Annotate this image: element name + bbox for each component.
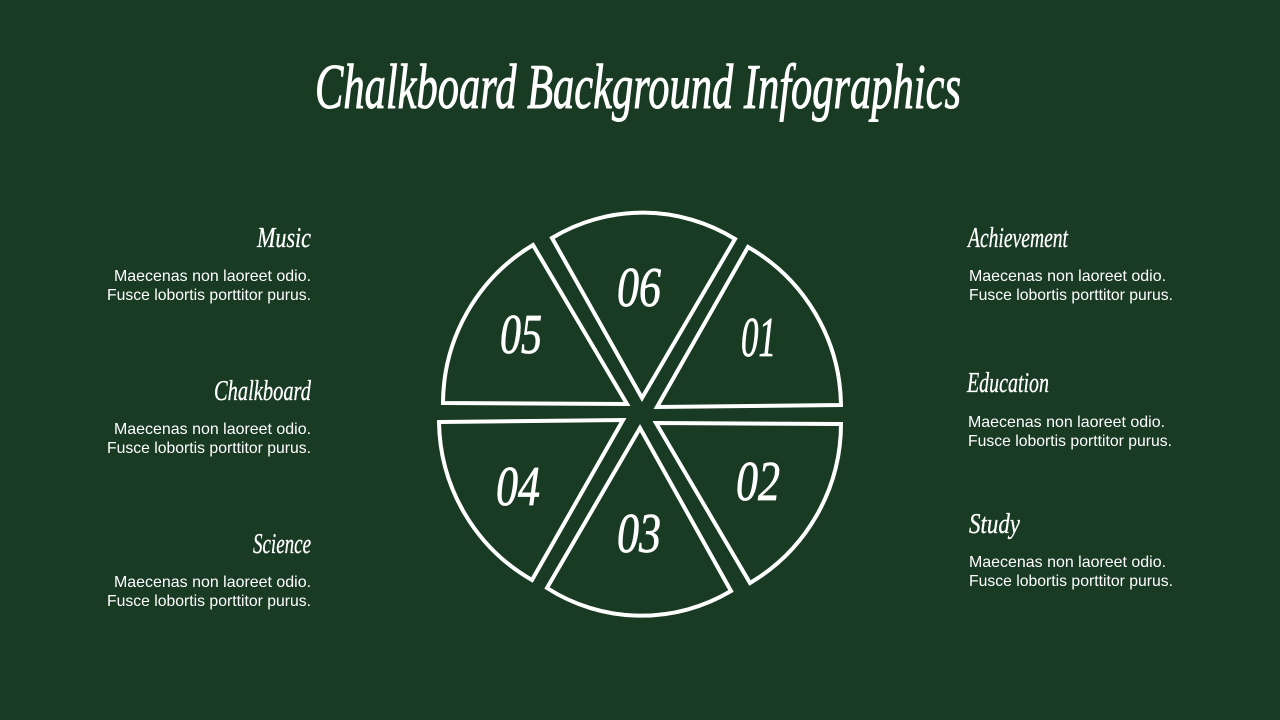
text block: Chalkboard: Fusce lobortis porttitor purus.: [107, 440, 311, 457]
segment 01: 01: [741, 307, 776, 369]
text block: Science: Science: [253, 529, 311, 560]
text block: Music: [107, 223, 311, 304]
text block: Science: Maecenas non laoreet odio.: [114, 574, 311, 591]
text block: Achievement: Achievement: [967, 223, 1069, 254]
text block: Achievement: Fusce lobortis porttitor purus.: [969, 287, 1173, 304]
text block: Study: Study: [969, 509, 1020, 540]
text block: Study: Maecenas non laoreet odio.: [969, 554, 1166, 571]
text block: Chalkboard: [107, 376, 312, 457]
segment 01: [657, 247, 841, 407]
segment 05: [443, 245, 627, 404]
segment 02: [656, 423, 841, 583]
text block: Education: [966, 368, 1172, 450]
text block: Chalkboard: Maecenas non laoreet odio.: [114, 421, 311, 438]
text block: Achievement: Maecenas non laoreet odio.: [969, 268, 1166, 285]
text block: Education: Education: [966, 368, 1049, 399]
segment 06: 06: [617, 257, 661, 319]
segment 03: [547, 428, 731, 616]
text block: Music: Fusce lobortis porttitor purus.: [107, 287, 311, 304]
text block: Education: Fusce lobortis porttitor purus.: [968, 433, 1172, 450]
text block: Education: Maecenas non laoreet odio.: [968, 414, 1165, 431]
pie chart: [439, 213, 841, 616]
segment 04: [439, 420, 623, 580]
text block: Science: Fusce lobortis porttitor purus.: [107, 593, 311, 610]
segment 06: [552, 213, 735, 398]
text block: Music: Music: [256, 223, 311, 254]
text block: Science: [107, 529, 311, 610]
text block: Study: [969, 509, 1173, 590]
text block: Achievement: [967, 223, 1173, 304]
text block: Music: Maecenas non laoreet odio.: [114, 268, 311, 285]
text block: Chalkboard: Chalkboard: [214, 376, 312, 407]
text block: Study: Fusce lobortis porttitor purus.: [969, 573, 1173, 590]
segment 04: 04: [496, 456, 540, 518]
title: Chalkboard Background Infographics: [315, 51, 961, 122]
segment 05: 05: [500, 304, 542, 366]
segment 02: 02: [736, 451, 780, 513]
segment 03: 03: [617, 503, 661, 565]
